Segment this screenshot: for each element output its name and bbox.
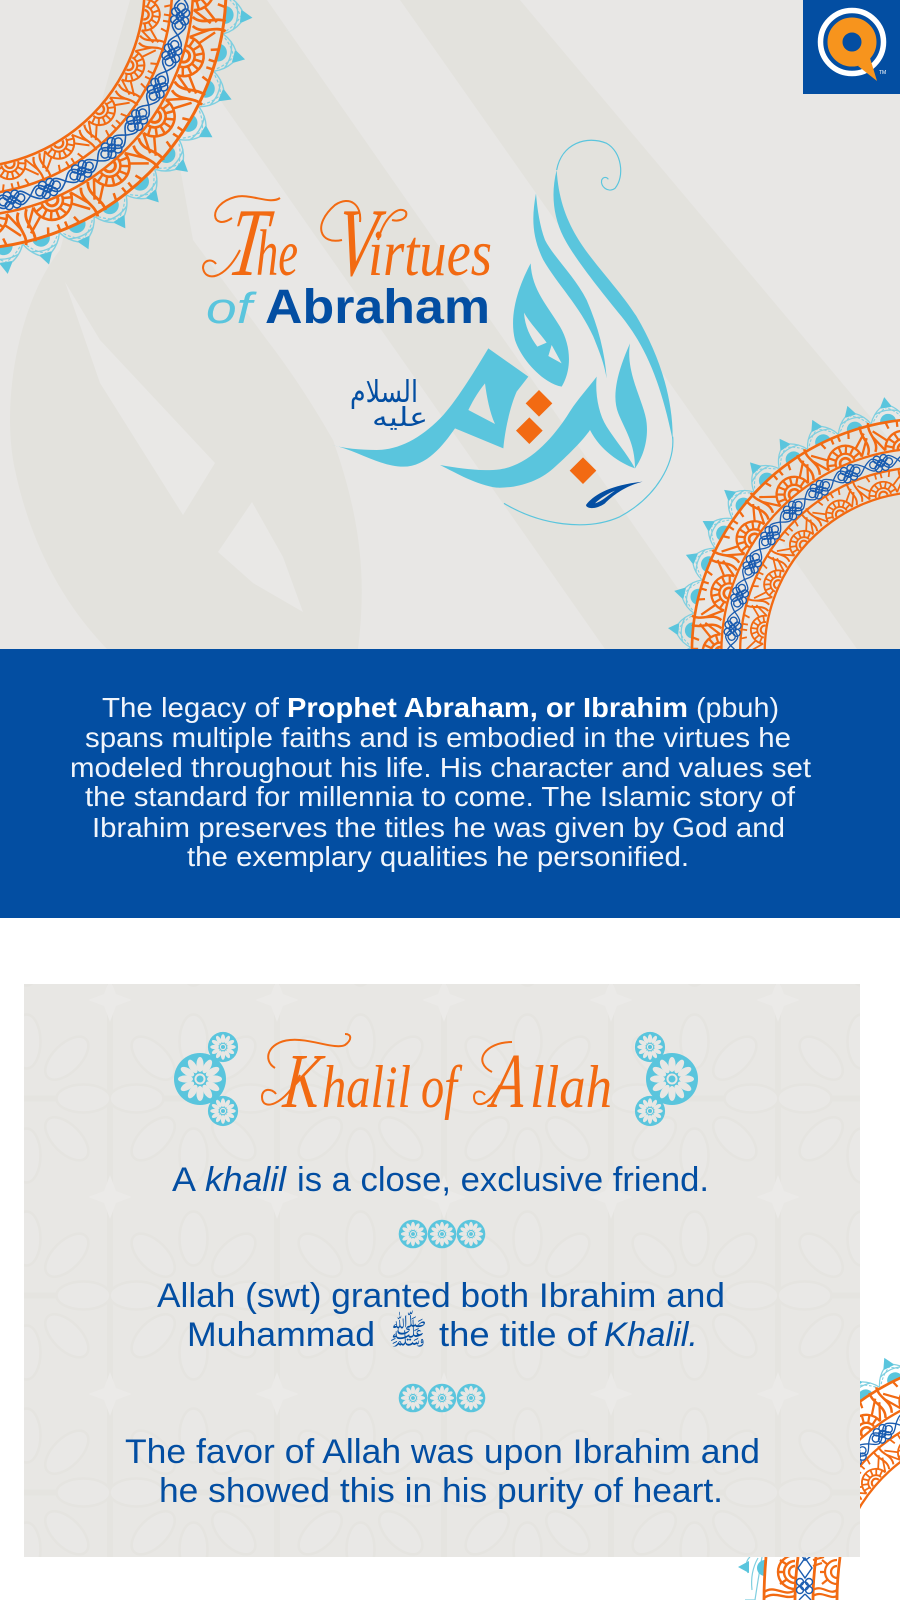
intro band: Ibrahim preserves the titles he was given by God and [92,812,785,843]
intro band [0,649,900,918]
panel heading: of [421,1054,463,1120]
intro band: the standard for millennia to come. The Islamic story of [85,781,795,812]
panel heading: A [485,1037,531,1124]
statement one: A [172,1161,196,1199]
intro band: (pbuh) [696,692,779,723]
ornamental ring: hero bottom right [653,388,900,701]
Arabic honorific [350,375,428,433]
statement one: is a close, exclusive friend. [297,1161,709,1199]
panel heading: llah [530,1054,612,1120]
rosette cluster left [174,1032,238,1126]
rosette cluster right [635,1032,698,1126]
panel: Khalil of Allah [24,984,860,1557]
statement two: Khalil. [604,1316,698,1354]
rosette divider one [399,1220,485,1248]
panel heading [262,1034,612,1124]
statement three: The favor of Allah was upon Ibrahim and [125,1433,760,1471]
logo badge [803,0,900,94]
statement two: Allah (swt) granted both Ibrahim and [157,1277,725,1315]
panel heading: halil [322,1054,411,1120]
statement two: ﷺ [389,1310,427,1352]
ornamental ring: below panel [738,1555,840,1600]
statement three [125,1433,760,1510]
statement two: Muhammad [187,1316,375,1354]
intro band: Prophet Abraham, or Ibrahim [287,692,688,723]
logo badge: TM [879,70,886,76]
statement three: he showed this in his purity of heart. [159,1472,723,1510]
Arabic calligraphy: Ibrahim [332,140,673,525]
title [203,188,492,334]
title: irtues [368,217,492,290]
title: V [332,188,389,296]
ornamental ring: right of panel [738,1278,900,1600]
title: Abraham [265,281,490,334]
title: of [206,284,258,333]
title: T [223,189,279,296]
Arabic honorific: السلام [350,375,418,410]
panel heading: K [279,1037,328,1124]
intro band: modeled throughout his life. His character and values set [70,752,811,783]
intro band: the exemplary qualities he personified. [187,841,689,872]
hero background [0,0,900,649]
intro band: The legacy of [102,692,279,723]
intro band: spans multiple faiths and is embodied in the virtues he [85,722,791,753]
statement two [157,1277,725,1354]
statement two: the title of [439,1316,598,1354]
statement one: khalil [205,1161,288,1199]
Arabic honorific: عليه [372,403,428,433]
ornamental ring: top left [0,0,266,282]
title: he [256,217,298,290]
rosette divider two [399,1384,485,1412]
